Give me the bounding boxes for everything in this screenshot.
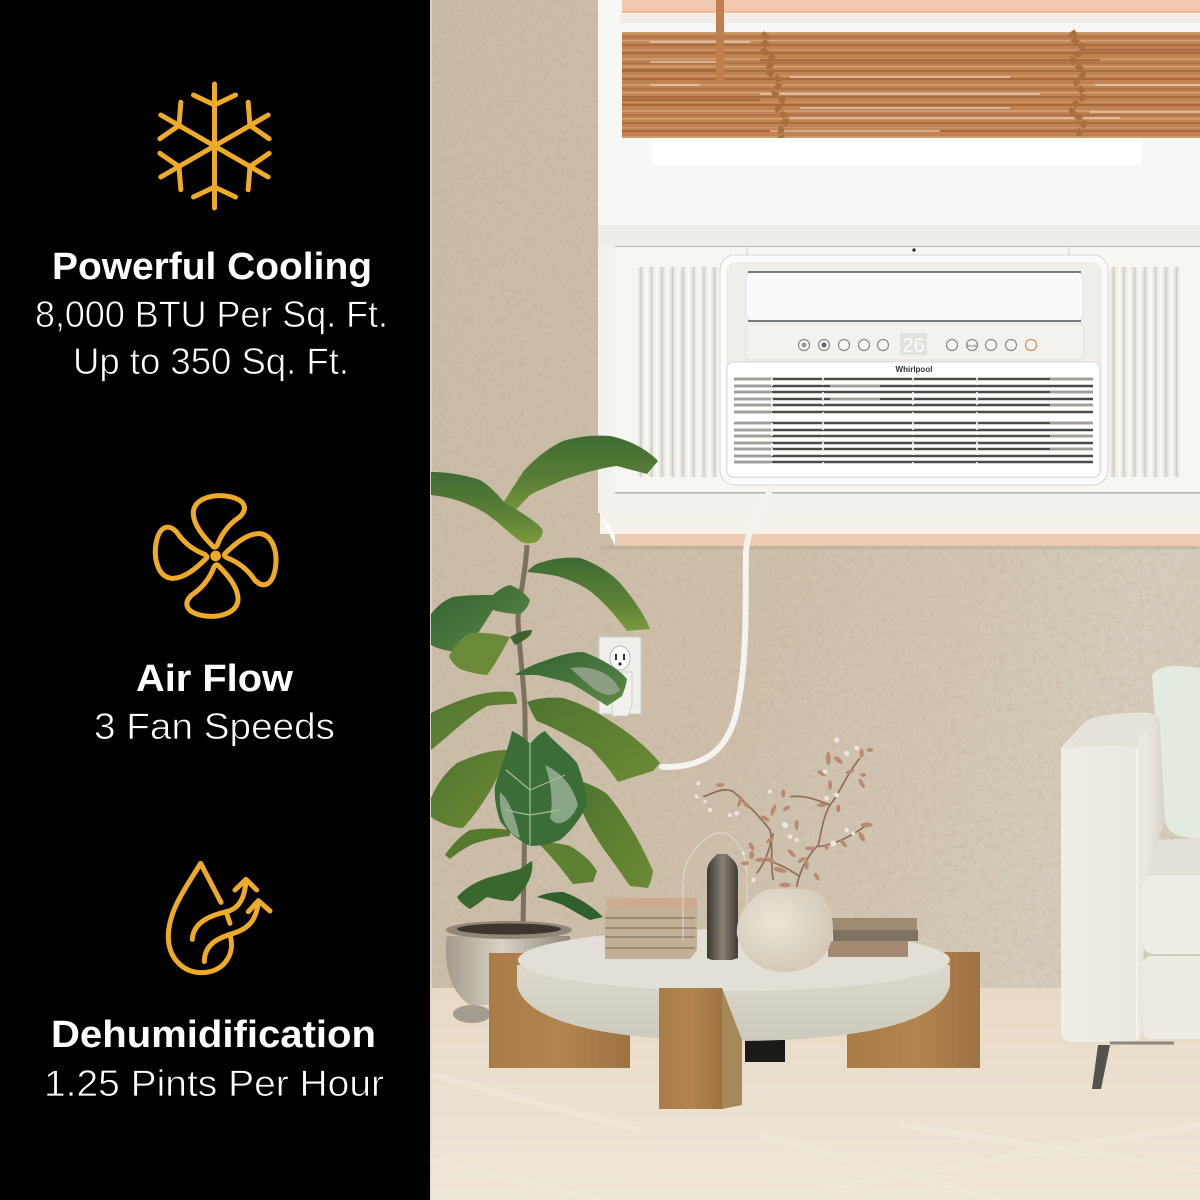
sofa pillow (1152, 666, 1200, 838)
sofa seat cushions (1143, 875, 1200, 954)
text: Powerful Cooling feature (35, 246, 388, 382)
air conditioner unit (720, 255, 1108, 485)
power cord (662, 488, 771, 767)
AC top air vent (746, 272, 1083, 321)
coffee table stone top (517, 929, 950, 1041)
wall outlet and plug (599, 637, 641, 716)
plant stem (518, 545, 527, 928)
panel: living room scene (430, 0, 1200, 1200)
text: Powerful Cooling feature: Up to 350 Sq. Ft. (73, 341, 349, 382)
floor (431, 988, 1200, 1200)
coffee table front leg (659, 988, 742, 1109)
icon: water drop with rising arrows (168, 863, 270, 973)
icon: snowflake (150, 84, 279, 208)
sofa metal leg (1092, 1045, 1110, 1089)
glass dome (683, 833, 747, 940)
plant pot and saucer (446, 921, 572, 1023)
text: Air Flow feature: 3 Fan Speeds (94, 706, 335, 747)
dried branch arrangement (695, 737, 873, 887)
window daylight panel (652, 138, 1142, 165)
ficus plant (431, 436, 660, 928)
coffee table wood legs (back) (489, 952, 980, 1068)
center front leaf (495, 731, 587, 846)
panel: black feature sidebar (0, 0, 431, 1200)
text: Powerful Cooling feature: Powerful Cooling (52, 246, 372, 288)
AC control panel: 26 (902, 335, 925, 357)
left louvre (634, 267, 720, 477)
round white vase (737, 889, 833, 972)
AC control panel (746, 324, 1084, 360)
text: Air Flow feature (94, 658, 335, 747)
text: Dehumidification feature (44, 1014, 384, 1104)
AC control panel: Mode (967, 343, 978, 348)
plant leaves (431, 436, 660, 920)
window wall surround (598, 0, 1200, 513)
sofa back cushion (1145, 838, 1200, 880)
text: Dehumidification feature: 1.25 Pints Per Hour (44, 1063, 384, 1104)
text: Powerful Cooling feature: 8,000 BTU Per Sq. Ft. (35, 294, 388, 335)
text: Air Flow feature: Air Flow (136, 658, 293, 700)
stacked books (605, 898, 697, 959)
right louvre (1108, 267, 1180, 477)
AC front grille: Whirlpool (896, 365, 932, 374)
window blinds (620, 0, 1200, 138)
right stacked books (828, 918, 918, 957)
text: Dehumidification feature: Dehumidification (51, 1014, 376, 1056)
sofa arm (1061, 713, 1165, 1042)
AC front grille (727, 362, 1100, 477)
window sill (600, 513, 1200, 549)
dark ceramic bottle (707, 854, 738, 960)
icon: fan (155, 496, 276, 616)
white sofa (1061, 666, 1200, 1089)
wall (430, 0, 1200, 1200)
